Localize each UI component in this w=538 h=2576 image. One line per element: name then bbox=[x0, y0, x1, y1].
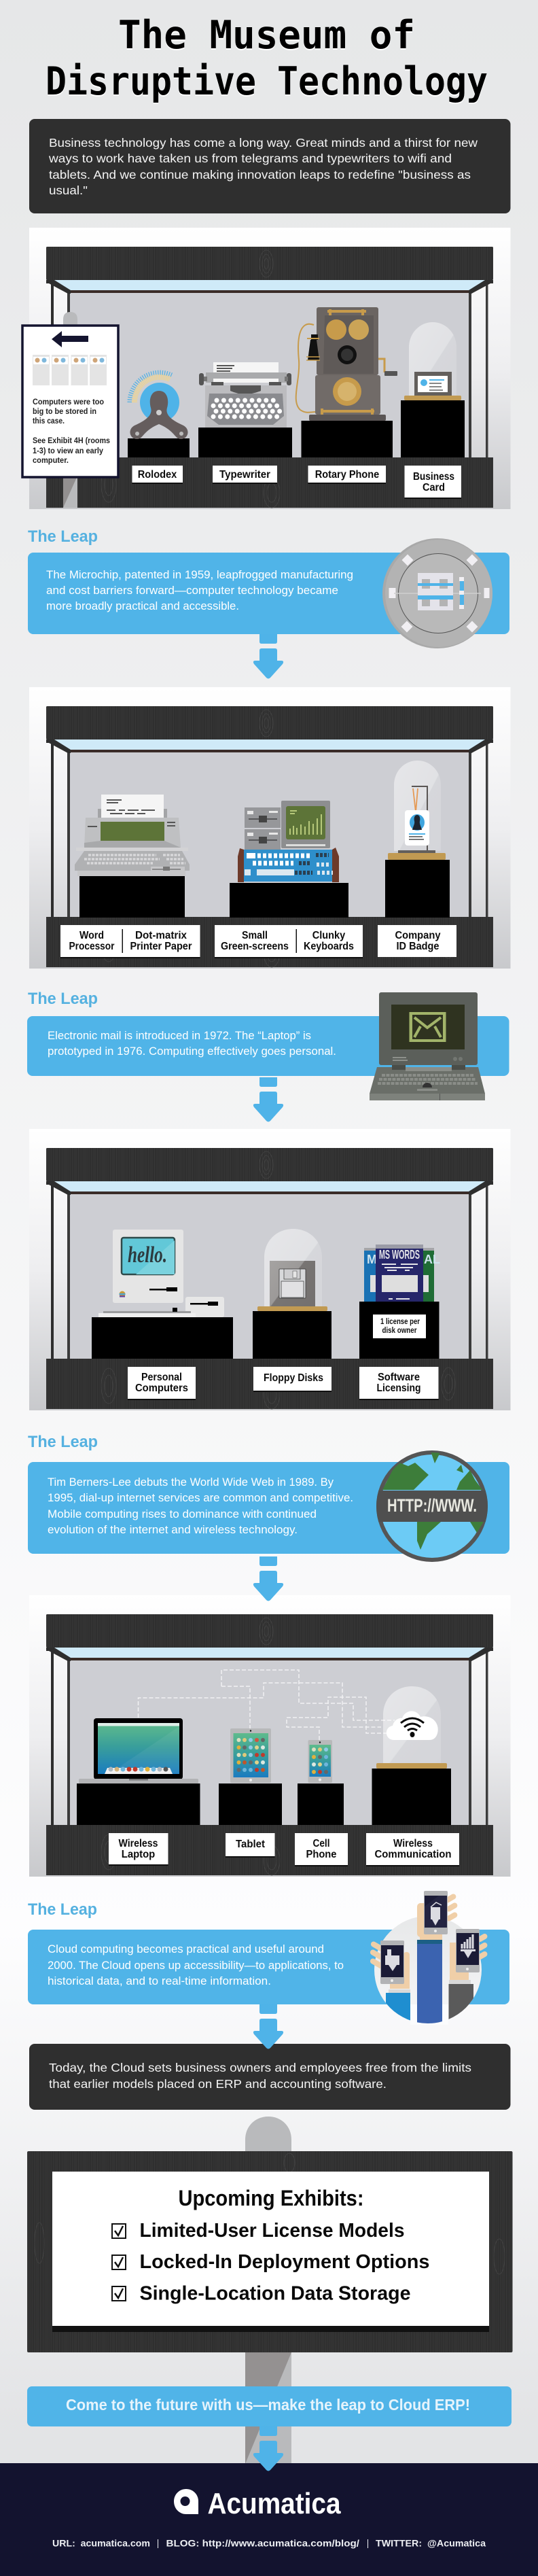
pedestals bbox=[92, 1302, 439, 1359]
icon: rotary phone bbox=[296, 307, 397, 421]
panel: leap 4 cloud computing: 2000. The Cloud opens up accessibility—to applications, to bbox=[48, 1959, 344, 1972]
note: 1 license per disk owner bbox=[373, 1315, 426, 1338]
icon: wifi cloud under dome bbox=[376, 1686, 447, 1769]
icon: right phone bbox=[456, 1929, 480, 1972]
label: Personal Computers: Computers bbox=[135, 1382, 188, 1394]
footer links: BLOG: http://www.acumatica.com/blog/ bbox=[166, 2538, 359, 2549]
panel: leap 2 email and laptop: Electronic mail is introduced in 1972. The “Laptop” is bbox=[48, 1029, 311, 1042]
panel: leap 4 cloud computing bbox=[28, 1891, 509, 2027]
sign pole bbox=[63, 312, 77, 508]
label: Wireless Communication: Communication bbox=[375, 1849, 451, 1860]
panel: leap 3 world wide web: Mobile computing rises to dominance with continued bbox=[48, 1508, 317, 1520]
label: Typewriter: Typewriter bbox=[219, 469, 270, 481]
label: Business Card bbox=[405, 466, 461, 499]
label: word processor, dot-matrix printer paper bbox=[60, 925, 200, 958]
label: Wireless Laptop: Wireless bbox=[118, 1838, 158, 1849]
label: Rolodex: Rolodex bbox=[138, 469, 177, 481]
panel: leap 4 cloud computing: Cloud computing becomes practical and useful around bbox=[48, 1943, 324, 1955]
label: Tablet: Tablet bbox=[236, 1839, 265, 1850]
note: 1 license per disk owner: disk owner bbox=[382, 1325, 417, 1335]
icon: top phone bbox=[424, 1891, 448, 1934]
sign text: Computers were too bbox=[33, 397, 104, 406]
heading: upcoming exhibits: Upcoming Exhibits: bbox=[178, 2186, 364, 2210]
icon: rolodex bbox=[130, 372, 188, 439]
icon: word processor bbox=[75, 795, 190, 876]
label: small green-screens, clunky keyboards: Keyboards bbox=[304, 941, 354, 952]
panel: display case 2 bbox=[29, 687, 511, 969]
label: company ID badge: Company bbox=[395, 930, 441, 941]
panel: leap 4 cloud computing: historical data, and to real-time information. bbox=[48, 1974, 271, 1987]
panel: footer bbox=[0, 2463, 538, 2576]
label: small green-screens, clunky keyboards: Small bbox=[242, 930, 268, 941]
label: small green-screens, clunky keyboards: Clunky bbox=[312, 930, 346, 941]
sign text: computer. bbox=[33, 455, 69, 465]
panel: upcoming exhibits sign bbox=[27, 2151, 512, 2352]
heading: The Leap 3: The Leap bbox=[28, 1433, 98, 1451]
icon: left arrow bbox=[52, 331, 88, 347]
icon: software boxes: MS WORDS bbox=[379, 1248, 420, 1261]
display case frame 1 bbox=[29, 228, 511, 509]
arrow down 2 bbox=[253, 1077, 283, 1121]
footer links: URL: acumatica.com bbox=[52, 2538, 150, 2549]
icon: software boxes: AL bbox=[424, 1253, 440, 1266]
label: Business Card: Card bbox=[423, 482, 445, 493]
heading: The Leap 2: The Leap bbox=[28, 990, 98, 1008]
icon: software boxes: MS bbox=[367, 1253, 385, 1266]
panel: display case 3 bbox=[29, 1129, 511, 1410]
icon: typewriter bbox=[199, 362, 291, 428]
icon: floppy disk under dome bbox=[257, 1229, 327, 1311]
label: Typewriter bbox=[213, 466, 277, 484]
panel: display case 4 bbox=[29, 1595, 511, 1877]
panel: today the cloud: Today, the Cloud sets business owners and employees free from the limits bbox=[49, 2061, 471, 2074]
pedestals bbox=[79, 860, 450, 918]
icon: green-screen terminal and keyboard bbox=[238, 801, 339, 882]
title bbox=[46, 13, 488, 104]
label: Wireless Communication bbox=[366, 1833, 459, 1866]
label: company ID badge: ID Badge bbox=[397, 941, 440, 952]
panel: leap 1 microchip: and cost barriers forward—computer technology became bbox=[46, 584, 338, 597]
arrow down 4 bbox=[253, 2004, 283, 2049]
label: Floppy Disks bbox=[253, 1367, 331, 1392]
label: word processor, dot-matrix printer paper: Processor bbox=[69, 941, 114, 952]
footer links bbox=[52, 2538, 486, 2549]
label: word processor, dot-matrix printer paper: Dot-matrix bbox=[135, 930, 187, 941]
icon: personal computer bbox=[98, 1230, 224, 1317]
panel: display case 1 bbox=[22, 228, 511, 509]
panel: leap 3 world wide web: evolution of the internet and wireless technology. bbox=[48, 1523, 298, 1536]
arrow down 5 bbox=[253, 2426, 283, 2471]
checklist bbox=[112, 2220, 429, 2304]
sign post bbox=[245, 2117, 291, 2464]
label: Wireless Laptop: Laptop bbox=[122, 1849, 155, 1860]
label: company ID badge bbox=[378, 925, 456, 957]
sign: computers too big bbox=[22, 326, 118, 477]
icon: wireless laptop bbox=[79, 1718, 198, 1783]
note: 1 license per disk owner: 1 license per bbox=[380, 1317, 420, 1326]
label: Wireless Laptop bbox=[109, 1833, 168, 1866]
checklist: Single-Location Data Storage bbox=[140, 2282, 410, 2304]
label: Wireless Communication: Wireless bbox=[393, 1838, 433, 1849]
network dashed lines bbox=[139, 1670, 395, 1740]
label: Software Licensing: Licensing bbox=[376, 1382, 421, 1394]
display case frame 2 bbox=[29, 687, 511, 969]
panel: leap 1 microchip: more broadly practical and accessible. bbox=[46, 599, 239, 612]
pedestals bbox=[128, 400, 465, 457]
intro text panel: usual." bbox=[49, 184, 88, 197]
icon: personal computer: hello. bbox=[128, 1242, 167, 1268]
checklist: Limited-User License Models bbox=[140, 2220, 405, 2242]
label: Floppy Disks: Floppy Disks bbox=[264, 1372, 323, 1384]
icon: tablet bbox=[230, 1728, 271, 1783]
label: word processor, dot-matrix printer paper: Word bbox=[79, 930, 104, 941]
label: small green-screens, clunky keyboards: Green-screens bbox=[221, 941, 289, 952]
icon: globe with http band: HTTP://WWW. bbox=[387, 1495, 477, 1516]
footer links: TWITTER: @Acumatica bbox=[376, 2538, 486, 2549]
intro text panel: ways to work have taken us from telegrams and typewriters to wifi and bbox=[48, 152, 452, 165]
icon: early laptop with envelope bbox=[370, 992, 485, 1100]
icon: microchip bbox=[382, 538, 492, 648]
heading: The Leap 4: The Leap bbox=[28, 1900, 97, 1919]
title: Disruptive Technology bbox=[46, 59, 488, 104]
sign text: 1-3) to view an early bbox=[33, 446, 103, 455]
label: Cell Phone: Cell bbox=[312, 1838, 330, 1849]
icon: cell phone bbox=[308, 1740, 332, 1783]
label: Cell Phone bbox=[295, 1833, 348, 1866]
label: word processor, dot-matrix printer paper: Printer Paper bbox=[130, 941, 192, 952]
icon: globe with http band bbox=[376, 1451, 488, 1560]
label: Software Licensing bbox=[359, 1367, 439, 1400]
sign text: this case. bbox=[33, 416, 65, 425]
label: Tablet bbox=[226, 1833, 274, 1858]
sign text bbox=[33, 397, 110, 465]
display case frame 4 bbox=[29, 1595, 511, 1877]
sign text: See Exhibit 4H (rooms bbox=[33, 436, 110, 445]
icon: mainframe cabinets bbox=[33, 355, 107, 385]
heading: The Leap 1: The Leap bbox=[28, 527, 98, 546]
label: Rolodex bbox=[132, 466, 183, 484]
intro text panel: tablets. And we continue making innovation leaps to redefine "business as bbox=[49, 168, 471, 181]
panel: leap 2 email and laptop: prototyped in 1976. Computing effectively goes personal. bbox=[48, 1045, 336, 1058]
icon: left phone bbox=[380, 1940, 404, 1984]
label: Cell Phone: Phone bbox=[306, 1849, 337, 1860]
label: Personal Computers bbox=[128, 1367, 196, 1400]
panel: leap 2 email and laptop bbox=[27, 992, 509, 1100]
logo: Acumatica: Acumatica bbox=[208, 2487, 341, 2520]
panel: leap 3 world wide web: Tim Berners-Lee debuts the World Wide Web in 1989. By bbox=[48, 1476, 334, 1489]
label: Business Card: Business bbox=[413, 471, 454, 483]
arrow down 3 bbox=[253, 1556, 283, 1601]
arrow down 1 bbox=[253, 634, 283, 678]
label: small green-screens, clunky keyboards bbox=[215, 925, 363, 958]
panel: today the cloud bbox=[29, 2044, 511, 2110]
sign text: big to be stored in bbox=[33, 406, 96, 416]
panel: today the cloud: that earlier models placed on ERP and accounting software. bbox=[49, 2077, 387, 2091]
label: Software Licensing: Software bbox=[378, 1372, 420, 1383]
icon: business card under dome bbox=[404, 322, 461, 400]
pedestals bbox=[77, 1769, 451, 1825]
checklist: Locked-In Deployment Options bbox=[140, 2251, 429, 2273]
panel: leap 3 world wide web bbox=[28, 1451, 509, 1560]
intro text panel bbox=[29, 119, 511, 213]
label: Rotary Phone: Rotary Phone bbox=[315, 469, 380, 481]
icon: software boxes bbox=[364, 1245, 440, 1302]
call to action banner bbox=[27, 2386, 512, 2426]
call to action banner: Come to the future with us—make the leap to Cloud ERP! bbox=[66, 2396, 470, 2414]
panel: leap 1 microchip bbox=[28, 538, 509, 648]
panel: leap 3 world wide web: 1995, dial-up internet services are common and competitive. bbox=[48, 1491, 353, 1504]
title: The Museum of bbox=[118, 13, 415, 58]
intro text panel: Business technology has come a long way. Great minds and a thirst for new bbox=[49, 136, 478, 150]
icon: company ID badge under dome bbox=[388, 761, 446, 860]
label: Personal Computers: Personal bbox=[141, 1372, 182, 1383]
icon: hands holding phones bbox=[369, 1891, 488, 2027]
label: Rotary Phone bbox=[308, 466, 386, 484]
panel: leap 1 microchip: The Microchip, patented in 1959, leapfrogged manufacturing bbox=[46, 568, 353, 581]
display case frame 3 bbox=[29, 1129, 511, 1410]
